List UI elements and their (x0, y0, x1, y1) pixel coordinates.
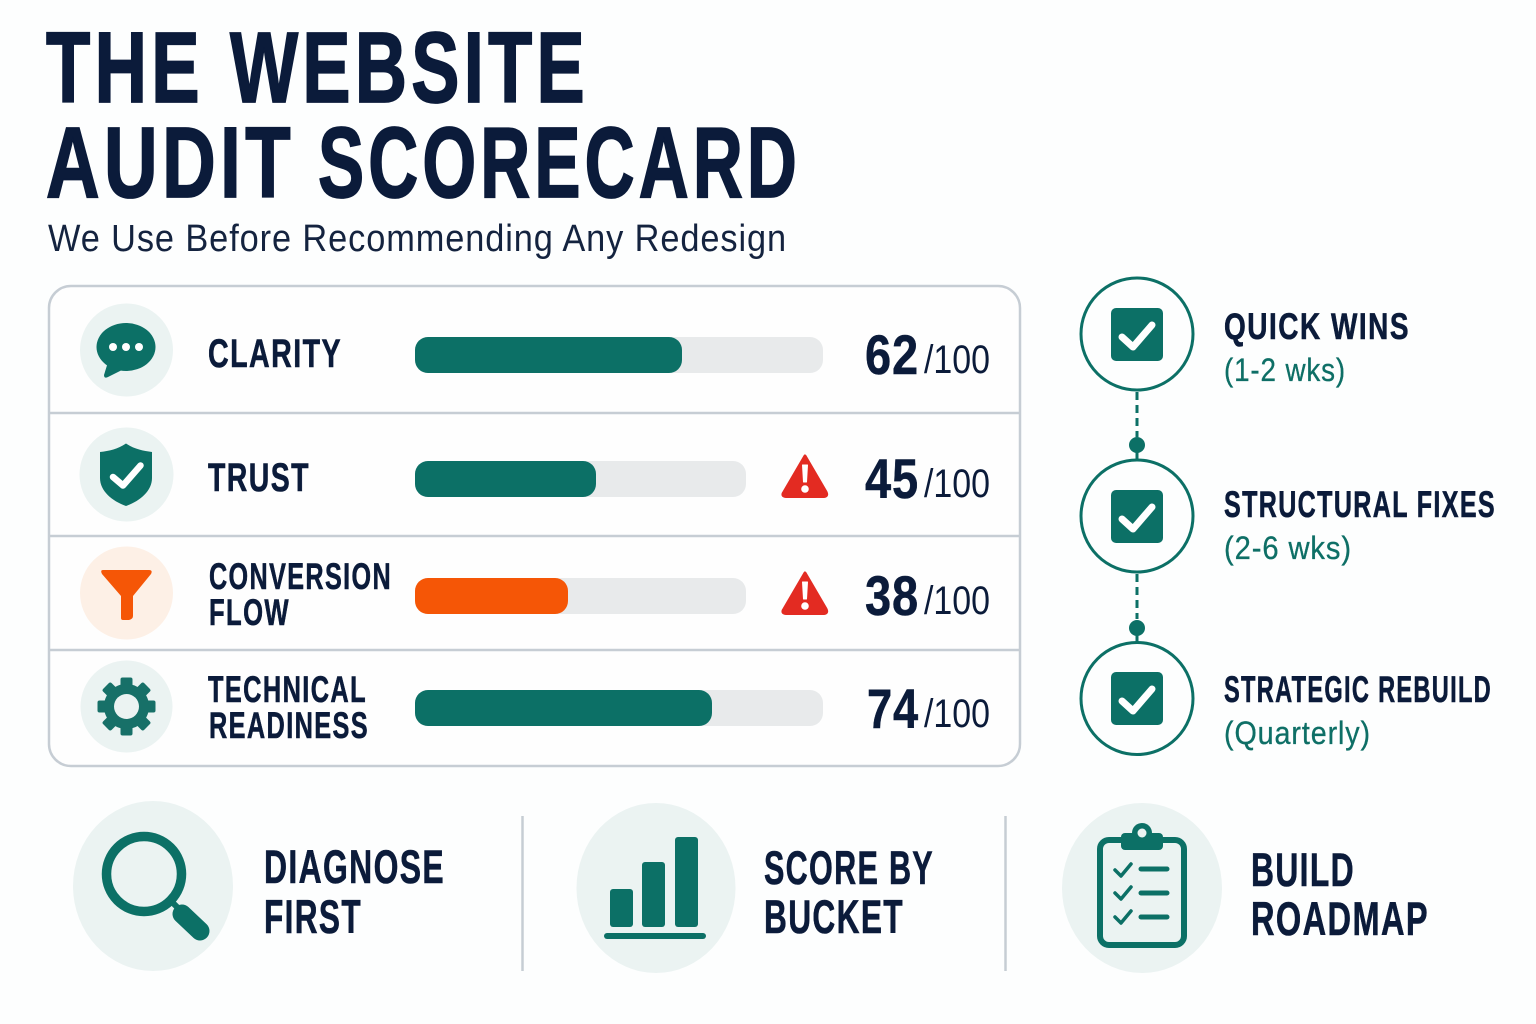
score: 45 of 100 (865, 447, 990, 510)
icon: shield (80, 428, 174, 522)
text: strategic rebuild: (Quarterly) (1224, 715, 1371, 751)
title (46, 12, 801, 219)
label: build roadmap: BUILD (1251, 843, 1355, 896)
connector: first to second (1129, 392, 1145, 459)
score: 74 of 100: /100 (924, 692, 990, 736)
label: technical readiness: TECHNICAL (208, 669, 367, 710)
score: 38 of 100: /100 (924, 579, 990, 623)
step: build roadmap (1062, 803, 1429, 973)
title: THE (46, 12, 204, 124)
icon: warning (783, 456, 827, 496)
bar: technical readiness 74 (415, 690, 823, 726)
step: score by bucket (576, 803, 934, 973)
label: diagnose first (264, 840, 445, 943)
score: 38 of 100: 38 (865, 564, 919, 627)
connector: second to third (1129, 574, 1145, 642)
score: 74 of 100: 74 (867, 677, 919, 740)
icon: funnel (80, 546, 173, 640)
score: 45 of 100: 45 (865, 447, 919, 510)
score: 62 of 100: 62 (865, 323, 919, 386)
icon: bar chart (576, 803, 736, 973)
label: score by bucket: SCORE BY (764, 841, 934, 894)
panel: scorecard (49, 286, 1020, 766)
score: 62 of 100: /100 (924, 338, 990, 382)
label: clarity: CLARITY (208, 332, 342, 376)
title: WEBSITE (230, 12, 589, 124)
title: AUDIT (46, 107, 295, 219)
score: 74 of 100 (867, 677, 990, 740)
icon: warning (783, 573, 827, 614)
score: 62 of 100 (865, 323, 990, 386)
subtitle: We Use Before Recommending Any Redesign (48, 218, 787, 260)
label: diagnose first: DIAGNOSE (264, 840, 445, 893)
title: SCORECARD (318, 107, 801, 219)
text: structural fixes: (2-6 wks) (1224, 530, 1352, 566)
icon: speech bubble (80, 304, 173, 396)
icon: magnifier (73, 801, 233, 971)
label: conversion flow (209, 556, 392, 633)
label: diagnose first: FIRST (264, 890, 362, 943)
text: structural fixes (1224, 484, 1496, 566)
icon: check one (1081, 278, 1193, 390)
step: diagnose first (73, 801, 445, 971)
panel: timeline (1081, 278, 1496, 754)
text: strategic rebuild (1224, 669, 1492, 751)
bar: conversion flow 38 (415, 578, 746, 614)
label: score by bucket (764, 841, 934, 943)
row: clarity (80, 304, 990, 396)
bar: clarity 62 (415, 337, 823, 373)
row: technical readiness (80, 660, 990, 752)
row: trust (80, 428, 990, 522)
text: quick wins: (1-2 wks) (1224, 352, 1346, 388)
score: 38 of 100 (865, 564, 990, 627)
row: conversion flow (80, 546, 990, 640)
score: 45 of 100: /100 (924, 462, 990, 506)
icon: clipboard (1062, 803, 1222, 973)
label: trust: TRUST (208, 456, 310, 500)
label: build roadmap: ROADMAP (1251, 892, 1429, 945)
label: score by bucket: BUCKET (764, 890, 904, 943)
bar: trust 45 (415, 461, 746, 497)
label: technical readiness (208, 669, 369, 746)
text: quick wins (1224, 306, 1410, 388)
icon: check two (1081, 460, 1193, 572)
label: conversion flow: CONVERSION (209, 556, 392, 597)
label: build roadmap (1251, 843, 1429, 945)
label: technical readiness: READINESS (209, 705, 369, 746)
text: quick wins: QUICK WINS (1224, 306, 1410, 347)
label: conversion flow: FLOW (209, 592, 290, 633)
icon: check three (1081, 642, 1193, 754)
icon: gear (80, 660, 172, 752)
